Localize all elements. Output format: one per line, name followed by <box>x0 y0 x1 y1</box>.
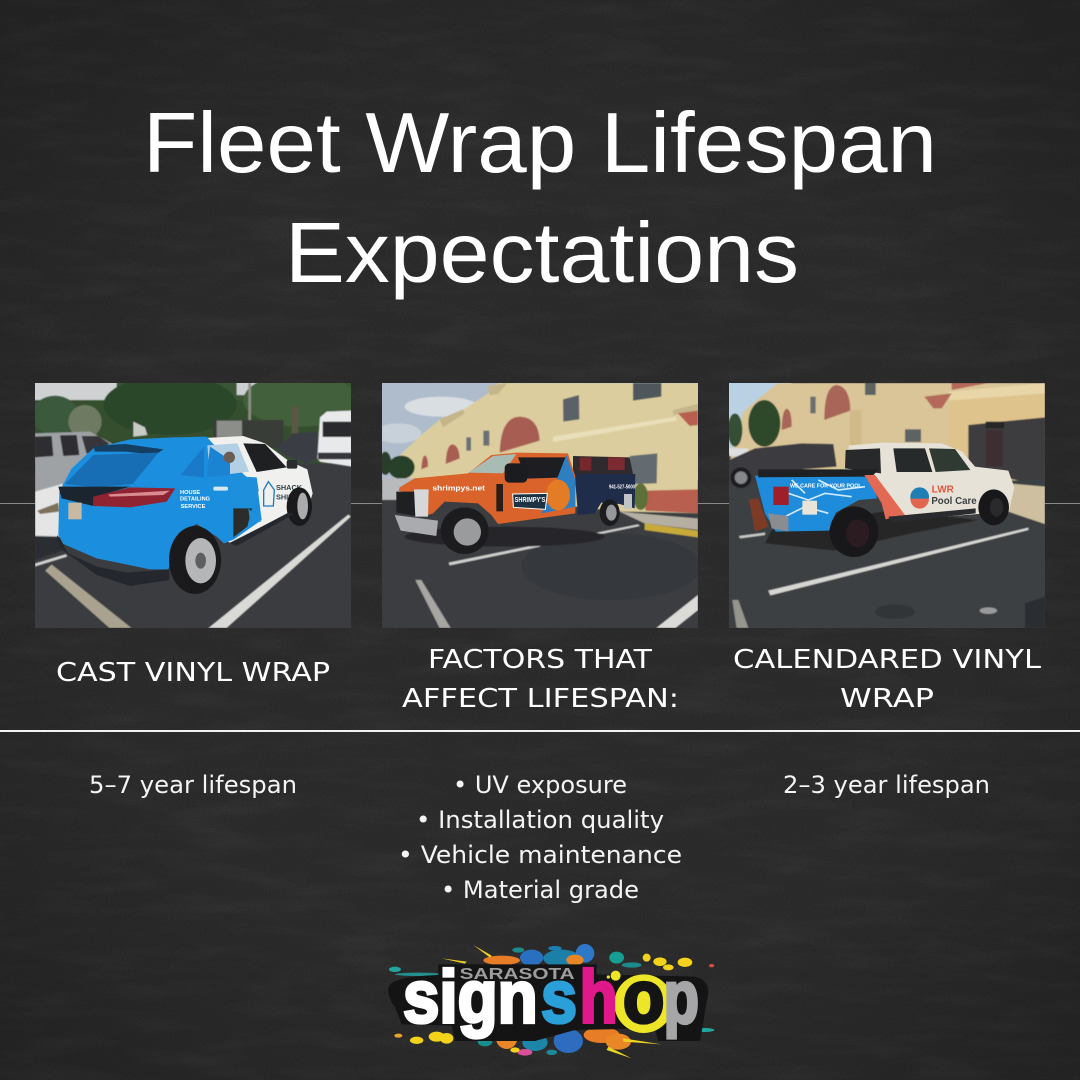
vehicle: white pickup: Pool Care <box>931 496 977 507</box>
column heading: calendared vinyl wrap <box>733 645 1042 714</box>
vehicle: orange truck: 941-527-5000 <box>609 485 635 491</box>
title <box>143 96 937 301</box>
vehicle: SUV body <box>57 436 313 594</box>
logo wordmark: SARASOTA <box>460 966 575 983</box>
column heading: calendared vinyl wrap: CALENDARED VINYL <box>733 645 1042 675</box>
list: factors that affect lifespan: • Material grade <box>441 876 639 904</box>
logo wordmark: h <box>580 955 618 1038</box>
logo wordmark: p <box>664 955 699 1038</box>
vehicle: SUV body: DETAILING <box>180 497 211 503</box>
column heading: cast vinyl wrap: CAST VINYL WRAP <box>56 658 330 688</box>
text: cast vinyl lifespan: 5–7 year lifespan <box>89 771 297 799</box>
logo wordmark <box>403 955 699 1038</box>
vehicle: SUV body: HOUSE <box>180 490 200 496</box>
vehicle: SUV body: SHINE <box>276 492 299 501</box>
vehicle: orange truck <box>395 453 635 554</box>
list: factors that affect lifespan: • UV exposure <box>453 771 627 799</box>
vehicle: white pickup <box>749 443 1014 557</box>
vehicle: SUV body: SERVICE <box>181 504 206 510</box>
vehicle: orange truck: shrimpys.net <box>432 484 486 493</box>
title: Expectations <box>285 206 799 301</box>
column heading: calendared vinyl wrap: WRAP <box>840 684 934 714</box>
photo: white and blue pickup (calendared vinyl) <box>729 383 1045 628</box>
logo wordmark: sign <box>403 955 538 1038</box>
vehicle: white pickup: LWR <box>932 485 955 496</box>
logo wordmark: s <box>541 955 577 1038</box>
logo dark backdrop <box>388 964 708 1041</box>
title: Fleet Wrap Lifespan <box>143 96 937 191</box>
logo: Sarasota Sign Shop <box>388 944 714 1058</box>
list: factors that affect lifespan: • Installation quality <box>416 806 664 834</box>
text: calendared vinyl lifespan: 2–3 year lifespan <box>783 771 990 799</box>
white divider line <box>0 730 1080 732</box>
list: factors that affect lifespan: • Vehicle maintenance <box>398 841 682 869</box>
logo paint splatter <box>388 944 714 1058</box>
thin line behind photos <box>0 503 1080 504</box>
column heading: factors that affect lifespan: FACTORS THAT <box>428 645 652 675</box>
logo wordmark: o <box>623 955 664 1038</box>
photo: orange wrapped service truck (factors) <box>382 383 698 628</box>
vehicle: white pickup: WE CARE FOR YOUR POOL <box>790 483 862 489</box>
column heading: factors that affect lifespan <box>402 645 679 714</box>
photo: blue wrapped SUV (cast vinyl) <box>35 383 351 628</box>
vehicle: orange truck: SHRIMPY'S <box>515 497 546 504</box>
column heading: factors that affect lifespan: AFFECT LIFESPAN: <box>402 684 679 714</box>
vehicle: SUV body: SHACK <box>276 483 303 492</box>
list: factors that affect lifespan <box>398 771 682 904</box>
